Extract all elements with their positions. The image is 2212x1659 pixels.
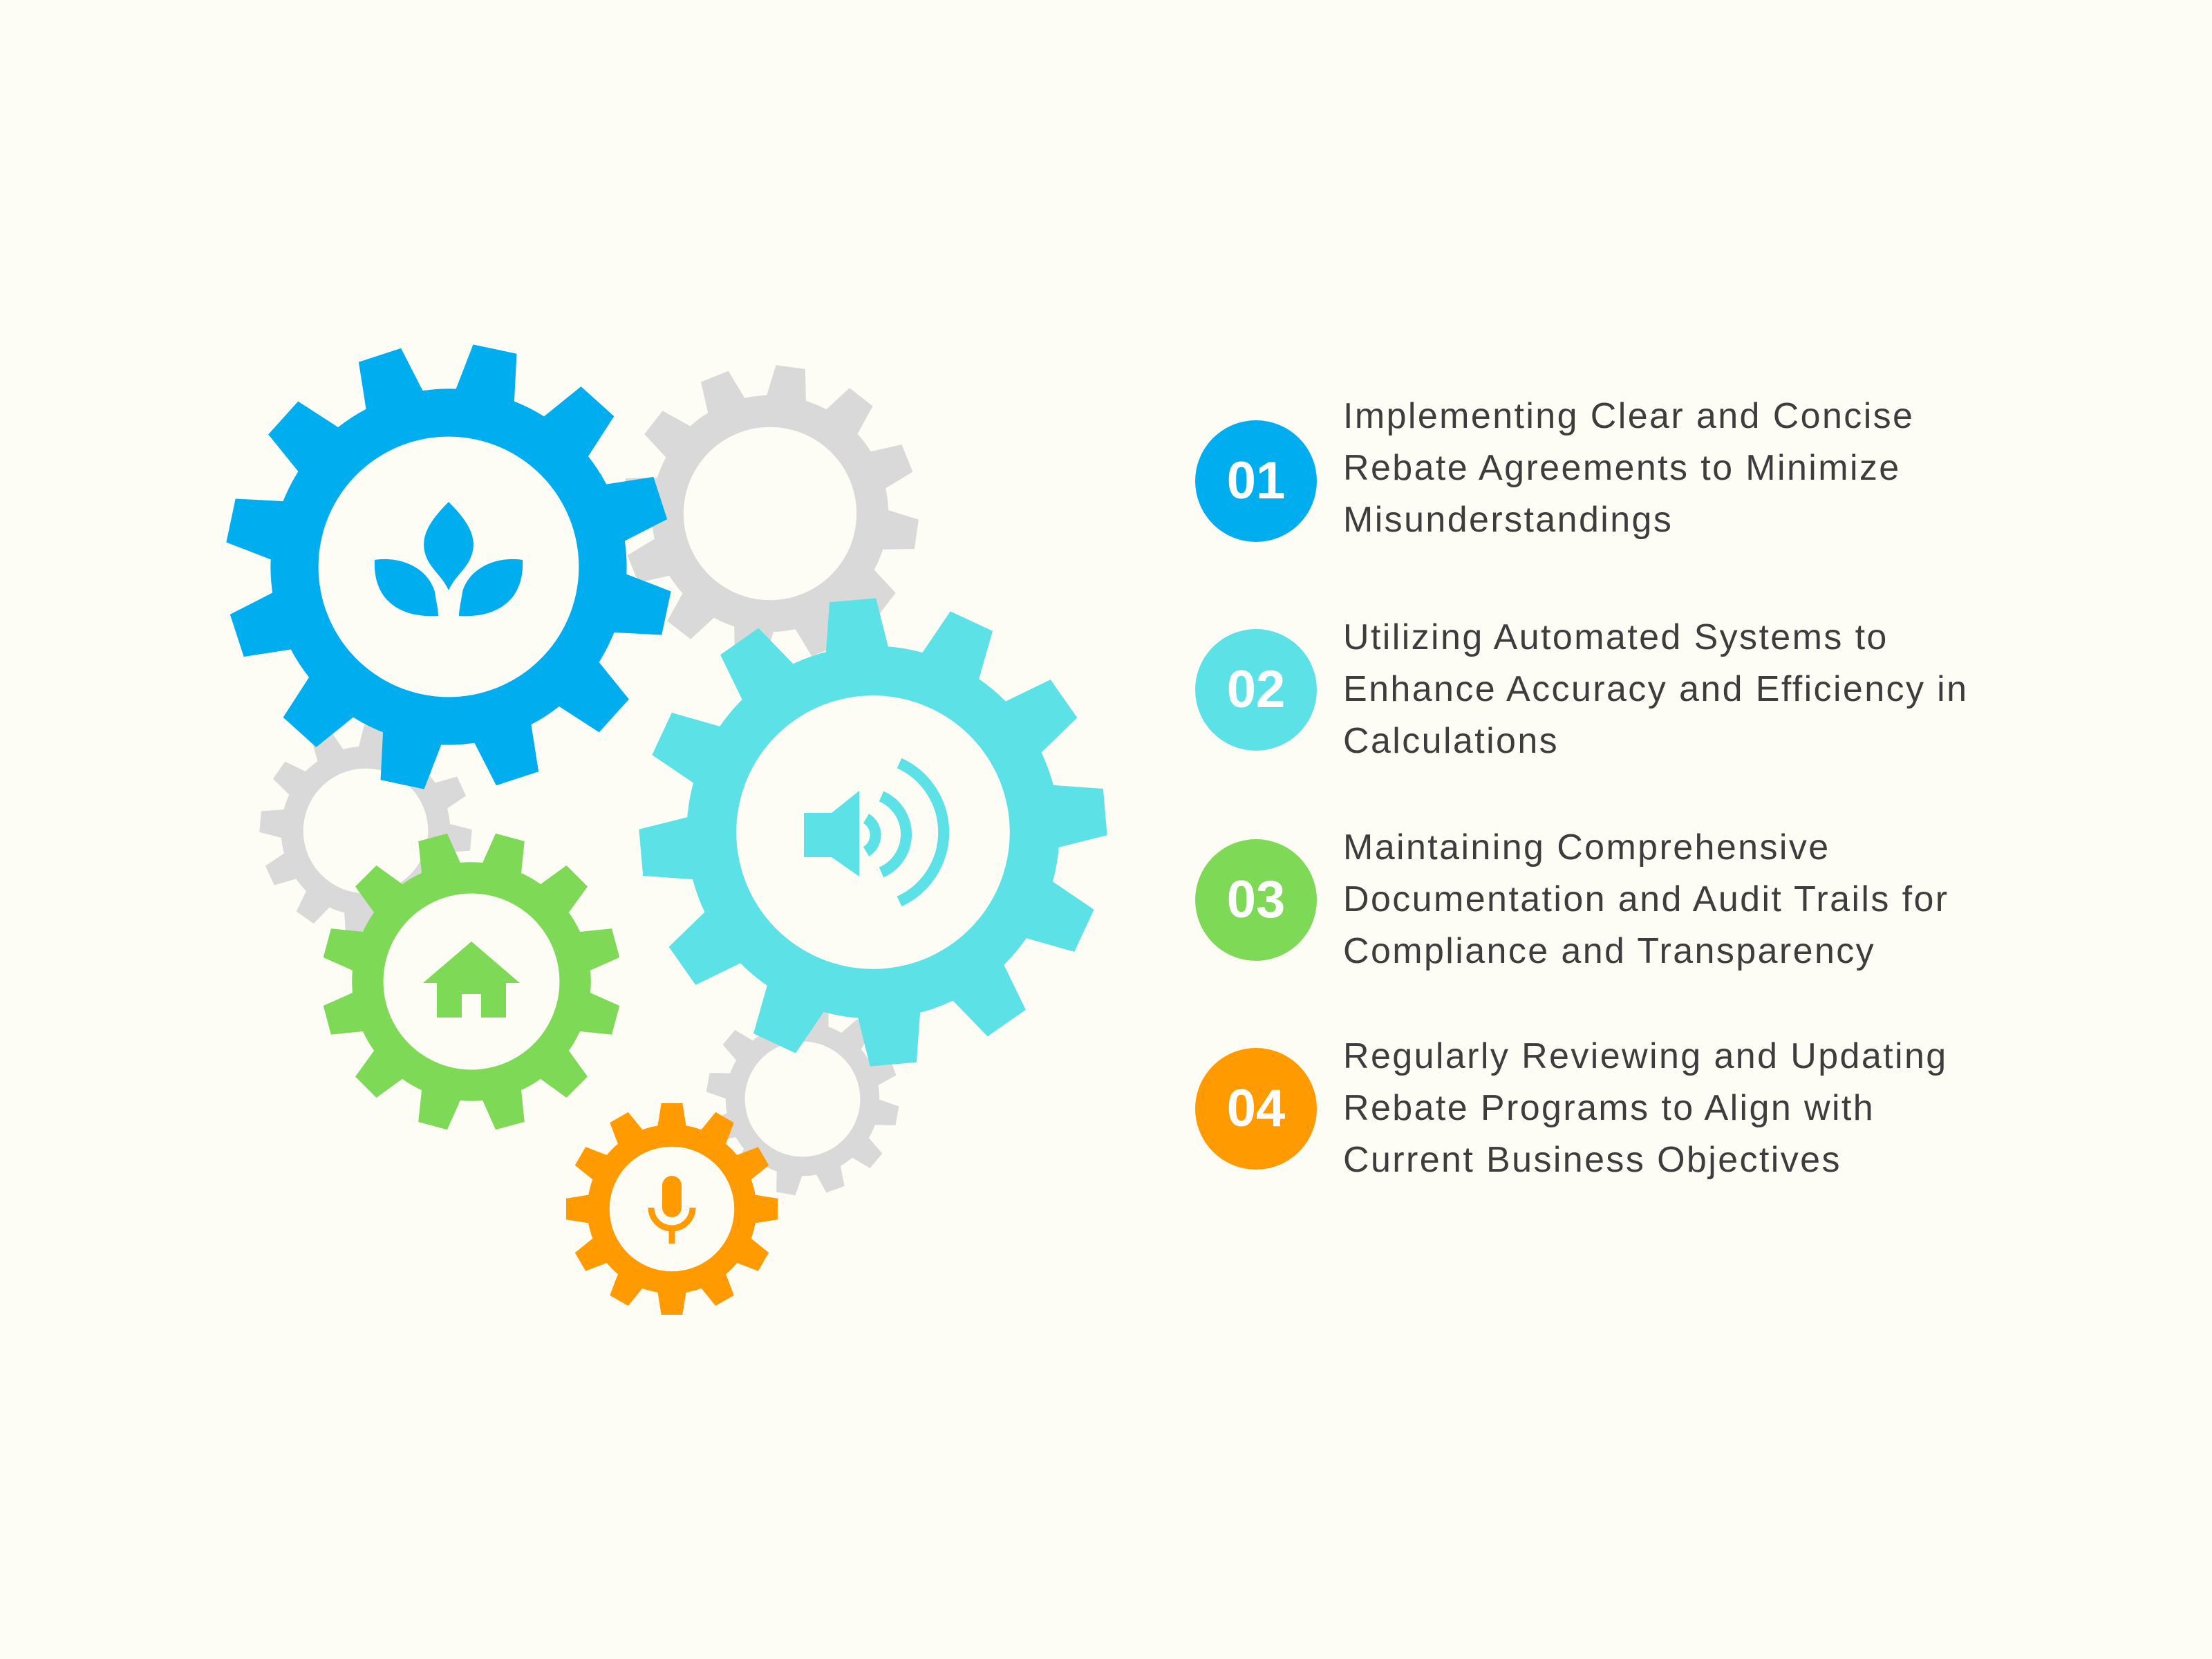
text 03 xyxy=(1343,827,1949,971)
gear: gray left xyxy=(251,716,480,946)
icon: house xyxy=(423,941,520,1018)
gear: blue with leaf icon xyxy=(185,303,713,831)
icon: microphone xyxy=(651,1176,693,1244)
item 02 xyxy=(1195,617,1968,761)
badge 04: 04 xyxy=(1227,1079,1285,1138)
text 02: Enhance Accuracy and Efficiency in xyxy=(1343,669,1968,709)
text 01: Implementing Clear and Concise xyxy=(1343,396,1914,436)
text 02: Utilizing Automated Systems to xyxy=(1343,617,1888,657)
badge 04 xyxy=(1195,1048,1317,1170)
text 01: Rebate Agreements to Minimize xyxy=(1343,448,1901,488)
text 01: Misunderstandings xyxy=(1343,500,1673,540)
text 04: Regularly Reviewing and Updating xyxy=(1343,1036,1948,1076)
item 04 xyxy=(1195,1036,1948,1180)
text 02 xyxy=(1343,617,1968,761)
text 04: Rebate Programs to Align with xyxy=(1343,1088,1875,1128)
gear: gray top xyxy=(603,346,937,681)
text 03: Compliance and Transparency xyxy=(1343,931,1875,971)
item 01 xyxy=(1195,396,1914,542)
gear: orange with microphone icon xyxy=(566,1103,778,1315)
badge 03 xyxy=(1195,839,1317,961)
item 03 xyxy=(1195,827,1949,971)
icon: speaker xyxy=(804,763,944,901)
badge 02 xyxy=(1195,629,1317,751)
text 04: Current Business Objectives xyxy=(1343,1140,1841,1180)
badge 03: 03 xyxy=(1227,870,1285,929)
icon: leaf xyxy=(375,502,523,616)
text 03: Documentation and Audit Trails for xyxy=(1343,879,1949,919)
gear: green with house icon xyxy=(288,798,655,1165)
badge 01 xyxy=(1195,420,1317,542)
text 04 xyxy=(1343,1036,1948,1180)
text 03: Maintaining Comprehensive xyxy=(1343,827,1830,868)
gear: gray bottom xyxy=(691,988,914,1210)
gear: cyan with speaker icon xyxy=(621,580,1125,1085)
badge 01: 01 xyxy=(1227,451,1285,510)
badge 02: 02 xyxy=(1227,660,1285,719)
text 02: Calculations xyxy=(1343,721,1559,761)
text 01 xyxy=(1343,396,1914,540)
